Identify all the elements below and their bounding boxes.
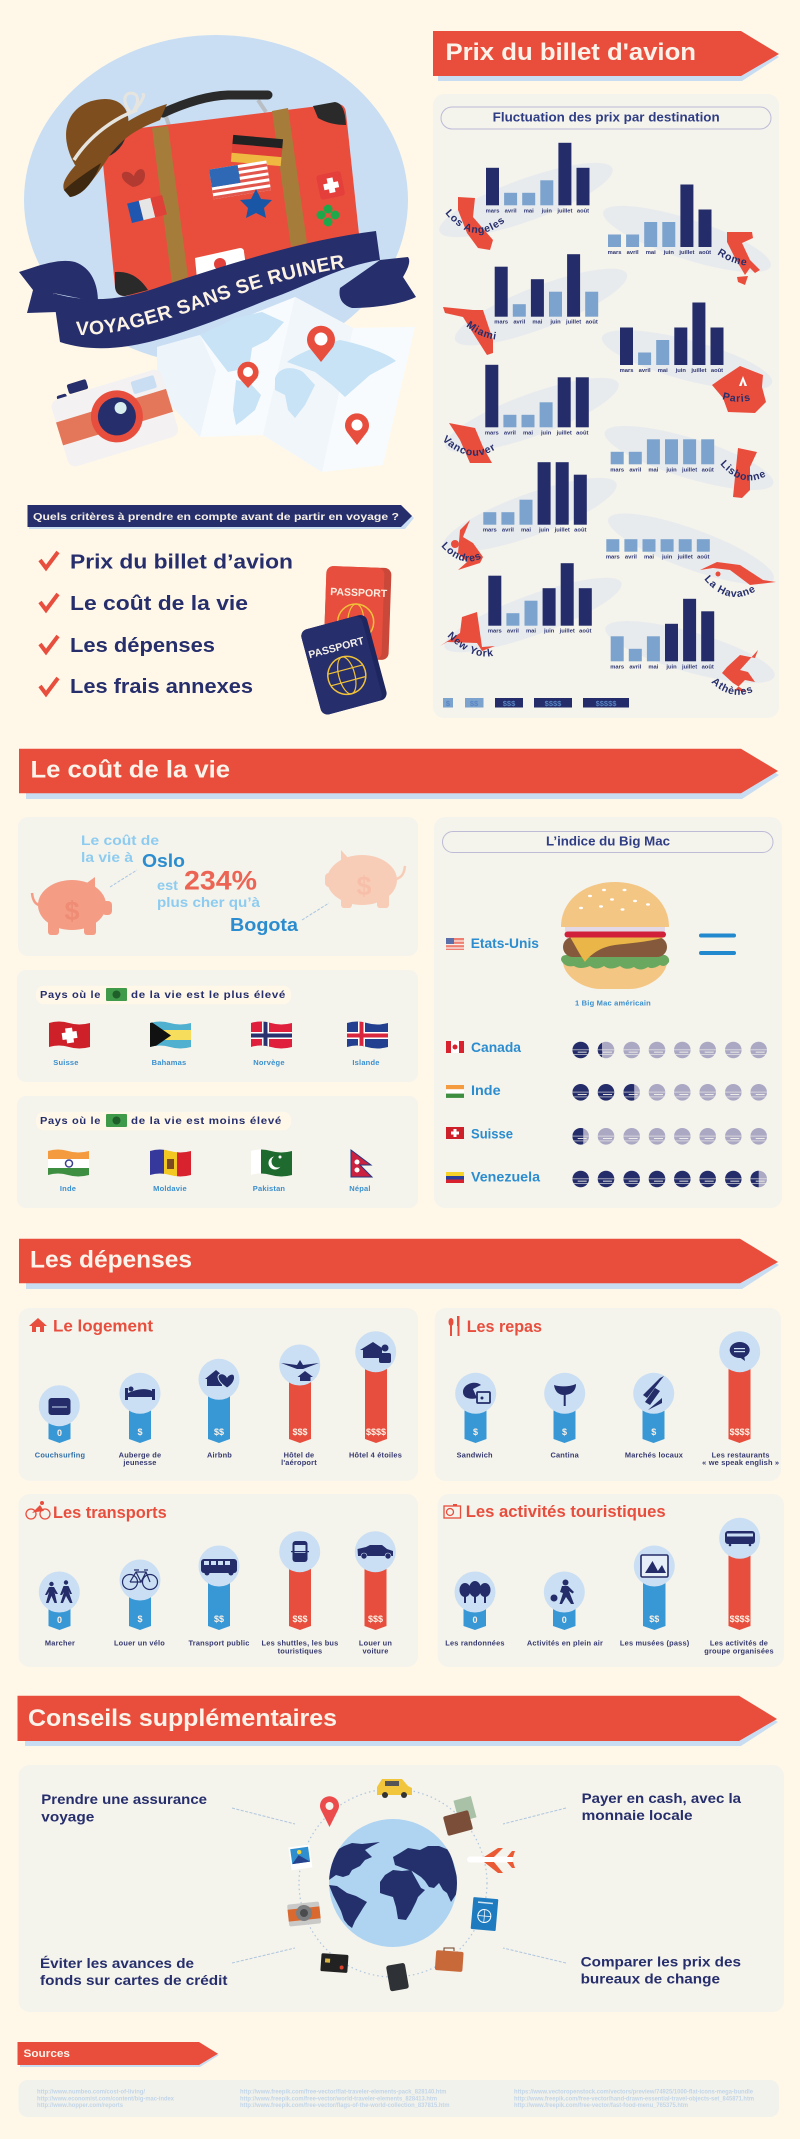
source column 1: http://www.numbeo.com/cost-of-living/ bbox=[37, 2090, 145, 2096]
icon: camera bbox=[46, 357, 180, 468]
bar chart: Los Angeles: juillet bbox=[556, 208, 573, 214]
panel heading: L’indice du Big Mac bbox=[546, 834, 670, 849]
question banner bbox=[28, 505, 414, 529]
panel: les transports bbox=[18, 1494, 418, 1667]
icon: suitcase bbox=[100, 95, 362, 296]
bar chart: Vancouver bbox=[485, 365, 589, 436]
icon: world map bbox=[157, 297, 415, 472]
country names: Népal bbox=[349, 1184, 371, 1193]
check item: dépenses: Les dépenses bbox=[70, 635, 215, 657]
banner: sources bbox=[18, 2042, 219, 2067]
country names: Moldavie bbox=[153, 1184, 187, 1193]
banner: le coût de la vie bbox=[19, 749, 779, 799]
panel heading: de la vie est le plus élevé bbox=[131, 989, 286, 1001]
panel heading: de la vie est moins élevé bbox=[131, 1115, 282, 1127]
bar chart: Athènes: mars bbox=[610, 664, 624, 670]
item: Marcher: 0 bbox=[57, 1615, 62, 1625]
item: Activités en plein air: 0 bbox=[562, 1615, 567, 1625]
country names: Islande bbox=[352, 1058, 380, 1067]
bar chart: Lisbonne: mars bbox=[610, 467, 624, 473]
item: Les activités de groupe: groupe organisées bbox=[704, 1646, 774, 1655]
row: Canada bbox=[446, 1039, 767, 1058]
item: Activités en plein air bbox=[527, 1572, 603, 1648]
item: Les shuttles: touristiques bbox=[278, 1646, 322, 1655]
equals sign bbox=[699, 934, 736, 955]
panel: indice du Big Mac bbox=[434, 817, 782, 1208]
item: Auberge de jeunesse bbox=[119, 1373, 161, 1467]
map and label: Miami: Miami bbox=[466, 320, 496, 340]
bar chart: Rome: juillet bbox=[678, 250, 695, 256]
bar chart: Paris: août bbox=[711, 368, 723, 374]
banner: conseils supplémentaires: Conseils supplémentaires bbox=[28, 1705, 337, 1732]
panel heading bbox=[442, 832, 773, 852]
cost comparison text: plus cher qu’à bbox=[157, 894, 260, 910]
bar chart: Paris: avril bbox=[639, 368, 651, 374]
row: Venezuela: Venezuela bbox=[471, 1169, 540, 1185]
map and label: La Havane: La Havane bbox=[704, 574, 755, 597]
price legend: $$ bbox=[470, 699, 479, 708]
flag: Moldavie bbox=[150, 1149, 191, 1178]
bar chart: Miami: juin bbox=[549, 320, 561, 326]
heading: Les transports bbox=[53, 1503, 167, 1522]
bar chart: La Havane: juin bbox=[661, 555, 673, 561]
row: Venezuela bbox=[446, 1169, 767, 1187]
bar chart: New York bbox=[488, 563, 592, 635]
tip: bureaux de change bbox=[581, 1954, 741, 1987]
item: Airbnb: Airbnb bbox=[207, 1450, 232, 1459]
price legend: $$$$$ bbox=[596, 699, 617, 708]
bar chart: Los Angeles: mai bbox=[524, 208, 534, 214]
icon: phone bbox=[386, 1963, 409, 1992]
bar chart: Rome: mars bbox=[608, 250, 621, 256]
country names: Pakistan bbox=[253, 1184, 285, 1193]
source column 2: http://www.freepik.com/free-vector/flat-traveler-elements-pack_828140.htm bbox=[240, 2090, 446, 2096]
banner: prix du billet: Prix du billet d'avion bbox=[446, 39, 696, 66]
bar chart: La Havane: avril bbox=[625, 555, 637, 561]
item: Hôtel de l'aéroport: l'aéroport bbox=[281, 1458, 317, 1467]
source column 1 bbox=[37, 2090, 175, 2109]
item: Auberge de jeunesse: jeunesse bbox=[122, 1458, 157, 1467]
bar chart: Rome: août bbox=[699, 250, 711, 256]
bar chart: Los Angeles bbox=[486, 143, 590, 214]
item: Couchsurfing: 0 bbox=[57, 1428, 62, 1438]
bar chart: Los Angeles: avril bbox=[505, 208, 517, 214]
icon: wallet with cash bbox=[443, 1796, 477, 1836]
item: Cantina: $ bbox=[562, 1427, 567, 1437]
map and label: Rome: Rome bbox=[718, 248, 746, 266]
cost comparison text: est bbox=[157, 877, 178, 893]
item: Louer un vélo bbox=[114, 1560, 165, 1648]
item: Les activités de groupe: $$$$ bbox=[730, 1614, 750, 1624]
row: Inde bbox=[446, 1082, 767, 1101]
price legend: $$$ bbox=[503, 699, 516, 708]
icon: burger bbox=[561, 882, 669, 989]
item: Cantina bbox=[544, 1373, 585, 1459]
panel: le logement bbox=[18, 1308, 418, 1481]
map and label: Athènes bbox=[711, 650, 758, 695]
bar chart: Rome: mai bbox=[646, 250, 656, 256]
flag: Islande bbox=[347, 1021, 388, 1050]
item: Les shuttles: $$$ bbox=[292, 1614, 308, 1624]
icon: passports bbox=[300, 566, 392, 716]
banner: prix du billet bbox=[433, 31, 779, 81]
bar chart: Miami: mars bbox=[494, 320, 508, 326]
row: Etats-Unis: Etats-Unis bbox=[471, 935, 539, 951]
map and label: New York: New York bbox=[448, 632, 494, 656]
bar chart: La Havane: mai bbox=[644, 555, 654, 561]
bar chart: Los Angeles: juin bbox=[541, 208, 552, 214]
panel: les activités touristiques bbox=[438, 1494, 784, 1667]
item: Hôtel 4 étoiles bbox=[349, 1331, 402, 1459]
panel heading: Pays où le bbox=[40, 1115, 101, 1127]
icon: camera small bbox=[287, 1901, 321, 1927]
item: Airbnb: $$ bbox=[214, 1427, 224, 1437]
bar chart: Vancouver: août bbox=[576, 430, 588, 436]
cost comparison text: Oslo bbox=[142, 851, 185, 871]
panel: coût de la vie le moins élevé bbox=[17, 1096, 418, 1208]
bar chart: Londres: mars bbox=[483, 528, 497, 534]
bar chart: Londres: mai bbox=[521, 528, 531, 534]
navy passport bbox=[300, 613, 388, 716]
item: Sandwich: $ bbox=[473, 1427, 478, 1437]
bar chart: Paris: mars bbox=[620, 368, 633, 374]
bar chart: Londres: août bbox=[574, 528, 586, 534]
tip: cartes de crédit: fonds sur cartes de crédit bbox=[40, 1972, 228, 1988]
item: Marcher: Marcher bbox=[45, 1639, 75, 1648]
map and label: Lisbonne: Lisbonne bbox=[720, 460, 766, 480]
tip: cartes de crédit bbox=[40, 1955, 228, 1988]
item: Transport public: Transport public bbox=[188, 1639, 250, 1648]
source column 2 bbox=[240, 2090, 450, 2109]
bar chart: Vancouver: mars bbox=[485, 430, 499, 436]
banner: les dépenses: Les dépenses bbox=[30, 1247, 192, 1274]
tip: bureaux de change: bureaux de change bbox=[581, 1971, 720, 1987]
red passport bbox=[323, 566, 392, 660]
item: Activités en plein air: Activités en plein air bbox=[527, 1639, 603, 1648]
item: Louer une voiture: $$$ bbox=[368, 1614, 383, 1624]
panel: conseils bbox=[18, 1765, 784, 2012]
tip: assurance: voyage bbox=[41, 1808, 95, 1824]
check item: prix: Prix du billet d’avion bbox=[70, 552, 293, 574]
item: Louer une voiture: voiture bbox=[362, 1646, 389, 1655]
bar chart: La Havane bbox=[606, 539, 710, 561]
panel heading bbox=[441, 107, 771, 129]
row: Suisse: Suisse bbox=[471, 1126, 513, 1142]
bar chart: New York: juin bbox=[543, 629, 555, 635]
item: Les activités de groupe: Les activités de bbox=[710, 1639, 768, 1648]
panel heading bbox=[36, 986, 291, 1004]
bar chart: Londres bbox=[483, 462, 587, 534]
bar chart: Londres: avril bbox=[502, 528, 514, 534]
country names: Suisse bbox=[53, 1058, 79, 1067]
check item: frais: Les frais annexes bbox=[70, 676, 253, 698]
bar chart: Miami: juillet bbox=[565, 320, 581, 326]
country names bbox=[60, 1184, 371, 1193]
item: Les musées bbox=[620, 1546, 690, 1648]
source column 3: http://www.freepik.com/free-vector/hand-drawn-essential-travel-objects-set_845871.htm bbox=[514, 2096, 754, 2102]
item: Les musées: $$ bbox=[649, 1614, 659, 1624]
item: Marchés locaux: $ bbox=[651, 1427, 656, 1437]
item: Les restaurants: « we speak english » bbox=[702, 1458, 779, 1467]
bar chart: Vancouver: juillet bbox=[556, 430, 572, 436]
icon: car bbox=[377, 1779, 412, 1798]
icon: plane bbox=[467, 1848, 515, 1873]
map and label: La Havane bbox=[700, 562, 776, 597]
flag: Suisse bbox=[49, 1021, 90, 1050]
icon: hat bbox=[63, 93, 167, 197]
item: Auberge de jeunesse: $ bbox=[137, 1427, 143, 1437]
flag: Inde bbox=[48, 1149, 90, 1178]
source column 1: http://www.economist.com/content/big-mac-index bbox=[37, 2096, 175, 2102]
cost comparison text: la vie à bbox=[81, 849, 133, 865]
heading: Les activités touristiques bbox=[466, 1502, 666, 1521]
item: Les randonnées: 0 bbox=[472, 1615, 478, 1625]
icon: right piggy bank bbox=[325, 850, 405, 908]
bar chart: Vancouver: mai bbox=[523, 430, 533, 436]
bar chart: Lisbonne: juillet bbox=[681, 467, 697, 473]
bar chart: Los Angeles: mars bbox=[486, 208, 499, 214]
bar chart: New York: mai bbox=[526, 629, 536, 635]
caption: 1 Big Mac américain bbox=[575, 999, 651, 1008]
price legend: $$$$ bbox=[545, 699, 562, 708]
banner: les dépenses bbox=[19, 1239, 779, 1289]
icon: passport bbox=[471, 1897, 498, 1931]
item: Les restaurants: Les restaurants bbox=[712, 1450, 770, 1459]
title: VOYAGER SANS SE RUINER bbox=[76, 255, 345, 335]
item: Transport public: $$ bbox=[214, 1614, 224, 1624]
item: Les randonnées bbox=[445, 1572, 505, 1648]
question banner: Quels critères à prendre en compte avant de partir en voyage ? bbox=[33, 511, 399, 523]
country names: Norvège bbox=[253, 1058, 285, 1067]
item: Les musées: Les musées (pass) bbox=[620, 1639, 690, 1648]
bar chart: New York: avril bbox=[507, 629, 519, 635]
source column 3 bbox=[514, 2090, 754, 2109]
item: Hôtel de l'aéroport: $$$ bbox=[292, 1427, 308, 1437]
item: Hôtel de l'aéroport bbox=[279, 1344, 320, 1467]
tip: bureaux de change: Comparer les prix des bbox=[581, 1954, 741, 1970]
map and label: Athènes: Athènes bbox=[711, 678, 752, 695]
item: Les shuttles bbox=[262, 1531, 338, 1655]
icon: credit card bbox=[320, 1953, 349, 1973]
item: Transport public bbox=[188, 1546, 250, 1648]
bar chart: Londres: juillet bbox=[554, 528, 570, 534]
map and label: Miami bbox=[443, 307, 496, 355]
panel: Oslo vs Bogota bbox=[18, 817, 418, 956]
icon: globe bbox=[327, 1819, 457, 1947]
cost comparison text: Bogota bbox=[230, 915, 299, 935]
icon: left piggy bank: $ bbox=[64, 896, 80, 926]
icon: suitcase small bbox=[435, 1948, 464, 1972]
map and label: Vancouver bbox=[444, 423, 494, 463]
row: Inde: Inde bbox=[471, 1082, 501, 1098]
bar chart: Paris: mai bbox=[658, 368, 668, 374]
country names: Inde bbox=[60, 1184, 76, 1193]
map and label: Los Angeles: Los Angeles bbox=[446, 208, 504, 236]
panel: coût de la vie le plus élevé bbox=[17, 970, 418, 1082]
item: Hôtel 4 étoiles: $$$$ bbox=[366, 1427, 386, 1437]
item: Auberge de jeunesse: Auberge de bbox=[119, 1450, 161, 1459]
cost comparison text bbox=[81, 832, 299, 935]
bar chart: New York: août bbox=[579, 629, 591, 635]
check item: coût: Le coût de la vie bbox=[70, 593, 248, 615]
item: Couchsurfing bbox=[35, 1385, 86, 1459]
checklist bbox=[40, 552, 293, 698]
bar chart: Paris: juillet bbox=[690, 368, 707, 374]
item: Sandwich: Sandwich bbox=[457, 1450, 493, 1459]
ribbon with title bbox=[19, 231, 416, 348]
bar chart: New York: mars bbox=[488, 629, 502, 635]
flag: Pakistan bbox=[251, 1149, 292, 1178]
tip: cash: Payer en cash, avec la bbox=[582, 1790, 741, 1806]
bar chart: Athènes: avril bbox=[629, 664, 642, 670]
country names: Bahamas bbox=[152, 1058, 186, 1067]
flag: Norvège bbox=[251, 1021, 292, 1050]
tip: cartes de crédit: Éviter les avances de bbox=[40, 1955, 194, 1971]
bar chart: Athènes: juin bbox=[665, 664, 677, 670]
icon: left piggy bank bbox=[32, 877, 112, 935]
navy passport: PASSPORT bbox=[307, 635, 366, 661]
item: Louer une voiture bbox=[355, 1531, 396, 1655]
bar chart: Athènes: août bbox=[702, 664, 714, 670]
price legend bbox=[443, 698, 629, 708]
bar chart: Lisbonne: août bbox=[702, 467, 714, 473]
map and label: Paris bbox=[712, 366, 766, 413]
map and label: Londres bbox=[442, 520, 483, 570]
panel heading: Pays où le bbox=[40, 989, 101, 1001]
country names bbox=[53, 1058, 380, 1067]
bar chart: Miami bbox=[494, 254, 598, 326]
bar chart: Miami: avril bbox=[513, 320, 526, 326]
background circle bbox=[24, 35, 408, 365]
bar chart: La Havane: juillet bbox=[677, 555, 693, 561]
heading: Le logement bbox=[53, 1317, 153, 1336]
flag: Népal bbox=[351, 1150, 372, 1177]
item: Cantina: Cantina bbox=[550, 1450, 580, 1459]
panel: les repas bbox=[435, 1308, 781, 1481]
item: Les randonnées: Les randonnées bbox=[445, 1639, 505, 1648]
banner: le coût de la vie: Le coût de la vie bbox=[30, 757, 230, 784]
map and label: Lisbonne bbox=[720, 448, 766, 498]
bar chart: Lisbonne: juin bbox=[665, 467, 677, 473]
icon: location pin bbox=[320, 1796, 339, 1827]
source column 2: http://www.freepik.com/free-vector/world-traveler-elements_828413.htm bbox=[240, 2096, 437, 2102]
banner: sources: Sources bbox=[24, 2048, 70, 2060]
item: Louer une voiture: Louer un bbox=[359, 1639, 392, 1648]
bar chart: Rome: juin bbox=[663, 250, 674, 256]
red passport: PASSPORT bbox=[330, 586, 388, 600]
bar chart: Vancouver: juin bbox=[540, 430, 552, 436]
item: Airbnb bbox=[198, 1359, 240, 1459]
item: Hôtel 4 étoiles: Hôtel 4 étoiles bbox=[349, 1450, 402, 1459]
cost comparison text: 234% bbox=[184, 866, 257, 896]
panel heading: Fluctuation des prix par destination bbox=[493, 110, 720, 125]
price legend: $ bbox=[446, 699, 451, 708]
bar chart: Paris bbox=[620, 302, 724, 374]
row: Suisse bbox=[446, 1126, 767, 1145]
item: Marchés locaux bbox=[625, 1373, 684, 1459]
bar chart: Athènes: mai bbox=[648, 664, 659, 670]
bar chart: Lisbonne bbox=[610, 439, 714, 473]
banner: conseils supplémentaires bbox=[18, 1696, 778, 1746]
map and label: Rome bbox=[718, 232, 760, 285]
item: Sandwich bbox=[455, 1373, 496, 1459]
panel heading bbox=[36, 1112, 291, 1130]
item: Louer un vélo: Louer un vélo bbox=[114, 1639, 165, 1648]
item: Les restaurants bbox=[702, 1331, 779, 1467]
source column 3: http://www.freepik.com/free-vector/fast-food-menu_765375.htm bbox=[514, 2103, 688, 2109]
item: Les shuttles: Les shuttles, les bus bbox=[262, 1639, 338, 1648]
bar chart: La Havane: mars bbox=[606, 555, 620, 561]
bar chart: Lisbonne: avril bbox=[629, 467, 642, 473]
bar chart: Paris: juin bbox=[675, 368, 686, 374]
map and label: Vancouver: Vancouver bbox=[444, 434, 494, 456]
source column 1: http://www.hopper.com/reports bbox=[37, 2103, 124, 2109]
panel: sources list bbox=[18, 2080, 779, 2117]
item: Hôtel de l'aéroport: Hôtel de bbox=[284, 1450, 314, 1459]
item: Louer un vélo: $ bbox=[137, 1614, 143, 1624]
icon: right piggy bank: $ bbox=[356, 871, 372, 901]
bar chart: Vancouver: avril bbox=[504, 430, 516, 436]
tip: assurance: Prendre une assurance bbox=[41, 1791, 207, 1807]
heading: Les repas bbox=[467, 1317, 542, 1336]
bar chart: New York: juillet bbox=[559, 629, 575, 635]
bar chart: Athènes bbox=[610, 599, 714, 670]
item: Les restaurants: $$$$ bbox=[730, 1427, 750, 1437]
map and label: New York bbox=[440, 612, 495, 656]
item: Marcher bbox=[39, 1572, 80, 1648]
item: Couchsurfing: Couchsurfing bbox=[35, 1450, 86, 1459]
flag: Bahamas bbox=[150, 1021, 191, 1050]
bar chart: Athènes: juillet bbox=[681, 664, 697, 670]
bar chart: Miami: mai bbox=[532, 320, 543, 326]
tip: assurance bbox=[41, 1791, 207, 1824]
icon: photo bbox=[288, 1845, 312, 1870]
bar chart: La Havane: août bbox=[697, 555, 709, 561]
hero illustration: suitcase, ribbon, map and camera bbox=[19, 35, 416, 472]
item: Les activités de groupe bbox=[704, 1518, 774, 1655]
row: Canada: Canada bbox=[471, 1039, 521, 1055]
tip: cash: monnaie locale bbox=[582, 1807, 693, 1823]
panel: fluctuation des prix bbox=[433, 94, 779, 718]
source column 3: https://www.vectoropenstock.com/vectors/preview/74925/1000-flat-icons-mega-bundle bbox=[514, 2090, 754, 2096]
item: Marchés locaux: Marchés locaux bbox=[625, 1450, 684, 1459]
bar chart: Rome: avril bbox=[627, 250, 639, 256]
tip: cash bbox=[582, 1790, 741, 1823]
bar chart: Rome bbox=[608, 184, 712, 256]
map and label: Londres: Londres bbox=[442, 542, 481, 562]
map and label: Los Angeles bbox=[446, 197, 504, 250]
cost comparison text: Le coût de bbox=[81, 832, 159, 848]
map and label: Paris: Paris bbox=[722, 392, 750, 402]
bar chart: Londres: juin bbox=[538, 528, 550, 534]
source column 2: http://www.freepik.com/free-vector/flags-of-the-world-collection_837815.htm bbox=[240, 2103, 450, 2109]
bar chart: Miami: août bbox=[586, 320, 598, 326]
bar chart: Lisbonne: mai bbox=[648, 467, 659, 473]
bar chart: Los Angeles: août bbox=[577, 208, 589, 214]
